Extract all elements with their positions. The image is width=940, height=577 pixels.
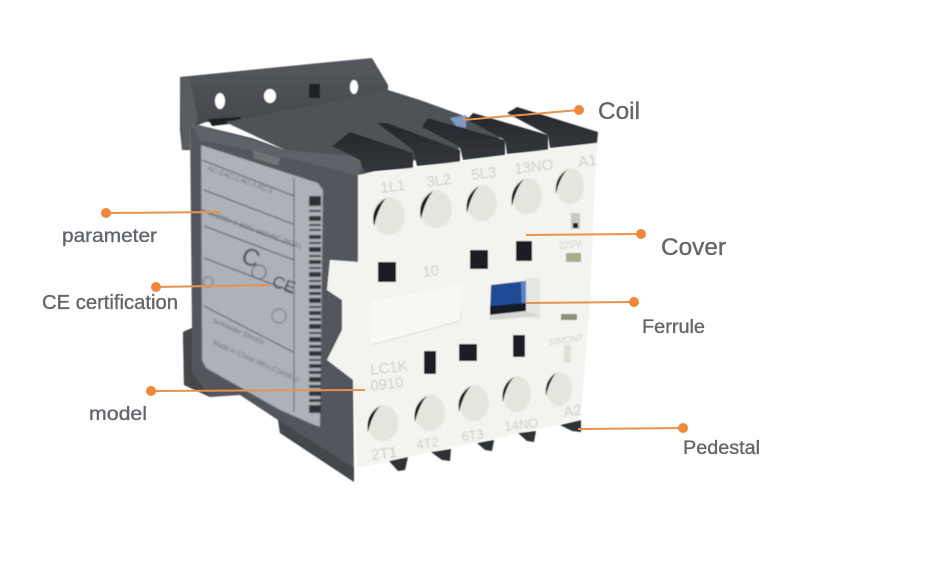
side specification label: IN 230V 9-690V 690VAC ZB141 xyxy=(206,210,303,251)
side specification label: Made in China 380-LC1K0910 xyxy=(211,339,300,384)
white front cover: 220V xyxy=(558,238,583,252)
side specification label: Schneider Electric xyxy=(211,317,266,347)
white front cover: LC1K xyxy=(369,358,409,379)
rear mounting rail xyxy=(180,58,388,150)
bottom terminal holes xyxy=(368,372,572,441)
side specification label: CE xyxy=(270,272,298,298)
white front cover: 2T1 xyxy=(370,444,398,464)
white front cover: A1 xyxy=(577,152,598,171)
callout: Pedestal: Pedestal xyxy=(683,438,760,459)
contactor product photo xyxy=(180,58,598,482)
top terminal holes xyxy=(373,168,584,235)
callout: Ferrule: Ferrule xyxy=(642,317,705,338)
barcode xyxy=(309,196,321,413)
side specification label: AC-3 AC-1 AC-3 AC-3 xyxy=(206,165,273,195)
dark terminal fins xyxy=(332,107,598,172)
side specification label: C xyxy=(238,242,263,274)
white front cover: 0910 xyxy=(369,374,405,395)
callout: Ferrule xyxy=(526,297,705,338)
small right-edge slots xyxy=(571,213,580,229)
white front cover: 5L3 xyxy=(470,164,497,184)
top deck xyxy=(225,90,510,175)
white front cover: 10 xyxy=(421,262,440,281)
white front cover: 13NO xyxy=(513,156,554,178)
callout: parameter: parameter xyxy=(62,226,158,247)
callout: model xyxy=(89,386,365,425)
callout: Pedestal xyxy=(578,423,760,459)
callout: CE certification: CE certification xyxy=(42,292,178,314)
callout: Coil xyxy=(463,98,640,125)
callout: Cover xyxy=(526,229,726,261)
white front cover: 6T3 xyxy=(461,426,485,444)
white front cover: A2 xyxy=(562,402,583,421)
white front cover: SIMONT xyxy=(548,333,584,347)
printed terminal marks: 1L1 xyxy=(379,177,406,197)
white front cover: 14NO xyxy=(504,415,539,434)
callout: model: model xyxy=(89,404,147,425)
callout: CE certification xyxy=(42,282,270,314)
callout: Cover: Cover xyxy=(661,234,726,261)
pedestal feet xyxy=(389,420,581,471)
blue coil glimpse xyxy=(450,115,466,128)
blue ferrule slider xyxy=(490,278,540,320)
square slots xyxy=(378,241,532,374)
callout: parameter xyxy=(62,208,221,247)
white front cover: 4T2 xyxy=(416,434,440,452)
dark side housing xyxy=(183,123,364,482)
callout: Coil: Coil xyxy=(598,98,640,125)
side specification label xyxy=(201,145,323,427)
white front cover: 3L2 xyxy=(425,171,452,191)
white front cover xyxy=(327,143,598,468)
